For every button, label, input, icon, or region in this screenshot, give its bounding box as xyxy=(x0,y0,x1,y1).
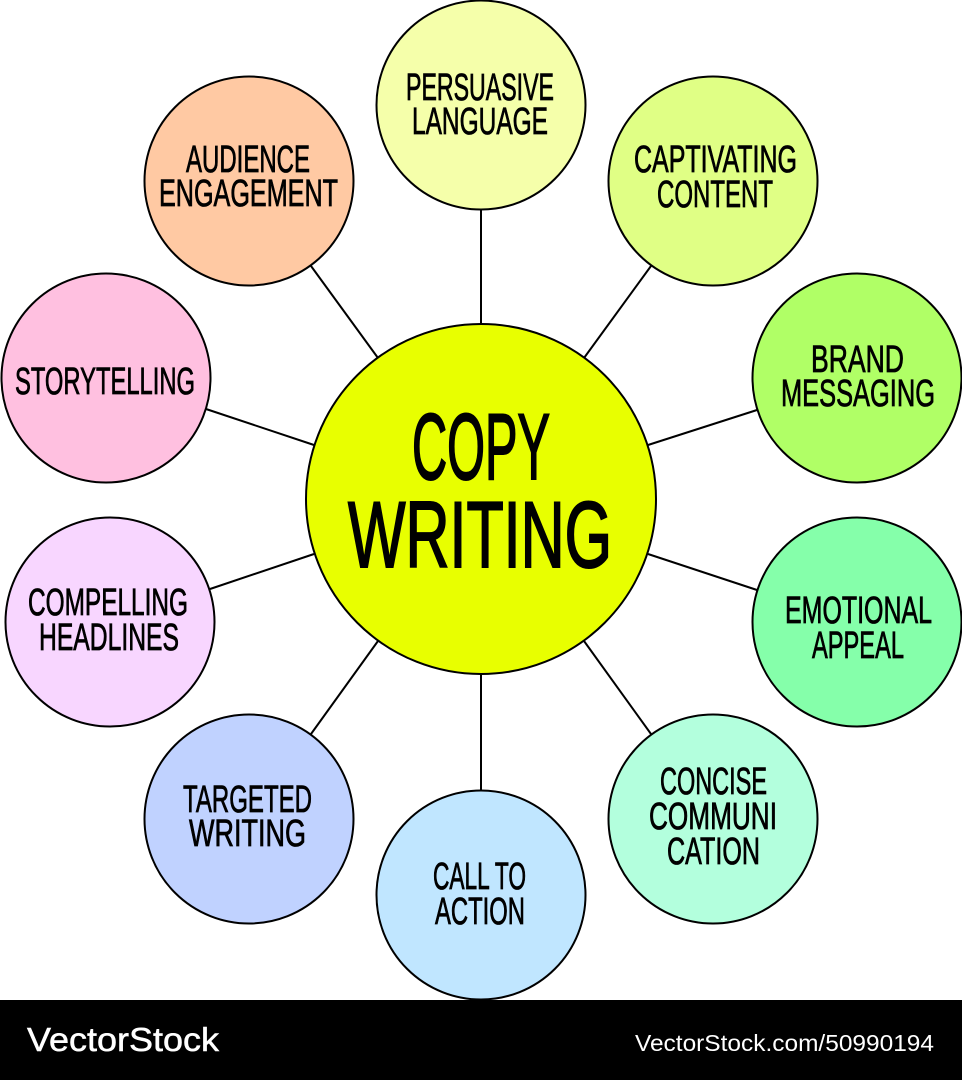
central circle: copy writing: COPY xyxy=(412,394,550,499)
central circle: copy writing: WRITING xyxy=(348,482,612,587)
connector lines xyxy=(206,210,757,790)
bubble: captivating content: CAPTIVATING xyxy=(634,139,797,181)
bubble: call to action: ACTION xyxy=(435,891,525,933)
bubble: emotional appeal: APPEAL xyxy=(812,625,904,667)
bubble: storytelling: STORYTELLING xyxy=(15,361,195,403)
footer bar: VectorStock xyxy=(27,1021,220,1058)
bubble: captivating content: CONTENT xyxy=(657,174,773,216)
bubble: call to action: CALL TO xyxy=(433,856,526,898)
bubble: storytelling xyxy=(2,274,210,482)
bubble: compelling headlines: HEADLINES xyxy=(39,617,179,659)
bubble: persuasive language: LANGUAGE xyxy=(412,101,548,143)
bubble: persuasive language xyxy=(376,0,586,210)
bubble: targeted writing: WRITING xyxy=(189,813,306,855)
footer bar xyxy=(0,1000,962,1080)
bubble: persuasive language: PERSUASIVE xyxy=(406,67,554,109)
bubble: captivating content xyxy=(608,76,818,286)
bubble: emotional appeal xyxy=(752,518,962,726)
bubble: compelling headlines xyxy=(6,518,214,726)
bubble: compelling headlines: COMPELLING xyxy=(28,582,188,624)
bubble: targeted writing xyxy=(144,714,354,924)
bubble: brand messaging: BRAND xyxy=(811,339,904,381)
central circle: copy writing xyxy=(306,324,656,674)
footer bar: VectorStock.com/50990194 xyxy=(635,1030,934,1056)
bubble: concise communication xyxy=(608,714,818,924)
bubble: concise communication: CONCISE xyxy=(660,761,767,803)
bubble: audience engagement: AUDIENCE xyxy=(186,139,310,181)
bubble: audience engagement: ENGAGEMENT xyxy=(159,173,338,215)
bubble: audience engagement xyxy=(144,76,354,286)
bubble: brand messaging xyxy=(752,274,962,482)
bubble: call to action xyxy=(376,790,586,1000)
bubble: concise communication: CATION xyxy=(667,831,760,873)
bubble: concise communication: COMMUNI xyxy=(649,796,777,838)
bubble: targeted writing: TARGETED xyxy=(183,779,312,821)
